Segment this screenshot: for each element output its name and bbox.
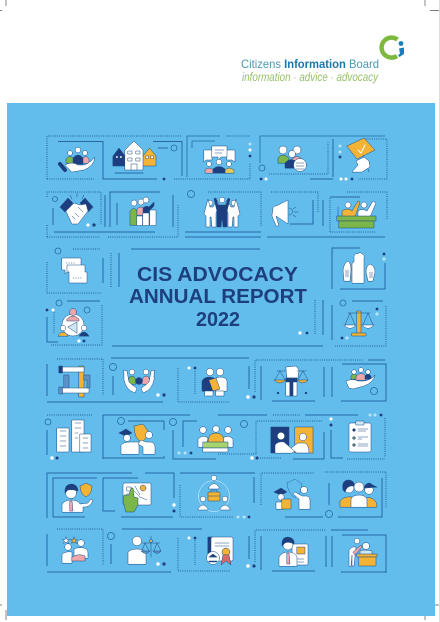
logo mark <box>382 38 404 58</box>
frame lines: row 4 <box>47 358 386 402</box>
frame lines: row 6 <box>47 472 386 518</box>
icon: cupped hands with people <box>124 369 154 393</box>
icon: three people raising hands <box>204 197 240 227</box>
title line 2: ANNUAL REPORT <box>129 286 307 308</box>
organisation name: Citizens Information Board <box>241 57 379 71</box>
icon: certificate <box>206 537 233 565</box>
frame lines: row 2 <box>47 190 387 237</box>
icon: raised hands <box>343 252 375 283</box>
icon: megaphone <box>272 200 298 226</box>
icon: megaphone in community circle <box>58 308 89 336</box>
logo: Citizens Information Board <box>241 38 404 84</box>
icon: consultation panels <box>271 427 313 453</box>
icon: people with database <box>278 146 306 172</box>
title line 1: CIS ADVOCACY <box>137 264 299 286</box>
icon: meeting around table <box>198 426 233 452</box>
icon: businessman with document <box>279 537 308 566</box>
icon: joined hands <box>59 366 90 397</box>
icon: podium speakers <box>337 201 376 228</box>
frame lines: centre band <box>46 248 386 346</box>
icon: teacher and student with shield <box>274 479 310 509</box>
title line 3: 2022 <box>196 309 240 331</box>
icon: people and bars <box>130 197 156 226</box>
frame lines: row 7 <box>47 529 386 573</box>
icon: scales of justice <box>344 311 374 336</box>
icon: service desk <box>349 538 377 566</box>
icon: office buildings <box>57 420 91 452</box>
icon: fist and scales <box>274 366 308 396</box>
tagline: information · advice · advocacy <box>242 72 379 84</box>
icon: hand holding people 2 <box>346 368 375 389</box>
frame lines: row 5 <box>45 414 385 460</box>
icon: businessman with shield <box>62 483 93 512</box>
icon: reviewers with stars <box>62 537 88 563</box>
icon: chat bubbles <box>62 258 87 283</box>
icon: handshake <box>60 193 93 224</box>
icon: student and shield <box>119 424 155 454</box>
icon: houses <box>113 141 156 173</box>
icon: team around briefcase <box>198 475 230 512</box>
page edge <box>439 0 440 622</box>
icon: chat group <box>204 146 235 173</box>
icon: clipboard <box>349 421 371 452</box>
title <box>129 264 307 331</box>
icon: hand holding people <box>60 147 95 172</box>
icon: two colleagues with document <box>202 368 227 396</box>
icon: touch map <box>123 483 151 512</box>
frame lines: row 1 <box>47 136 387 180</box>
icon: lawyer and scales <box>128 536 161 564</box>
icon: three colleagues <box>340 480 377 507</box>
icon: placard with check <box>347 138 375 172</box>
